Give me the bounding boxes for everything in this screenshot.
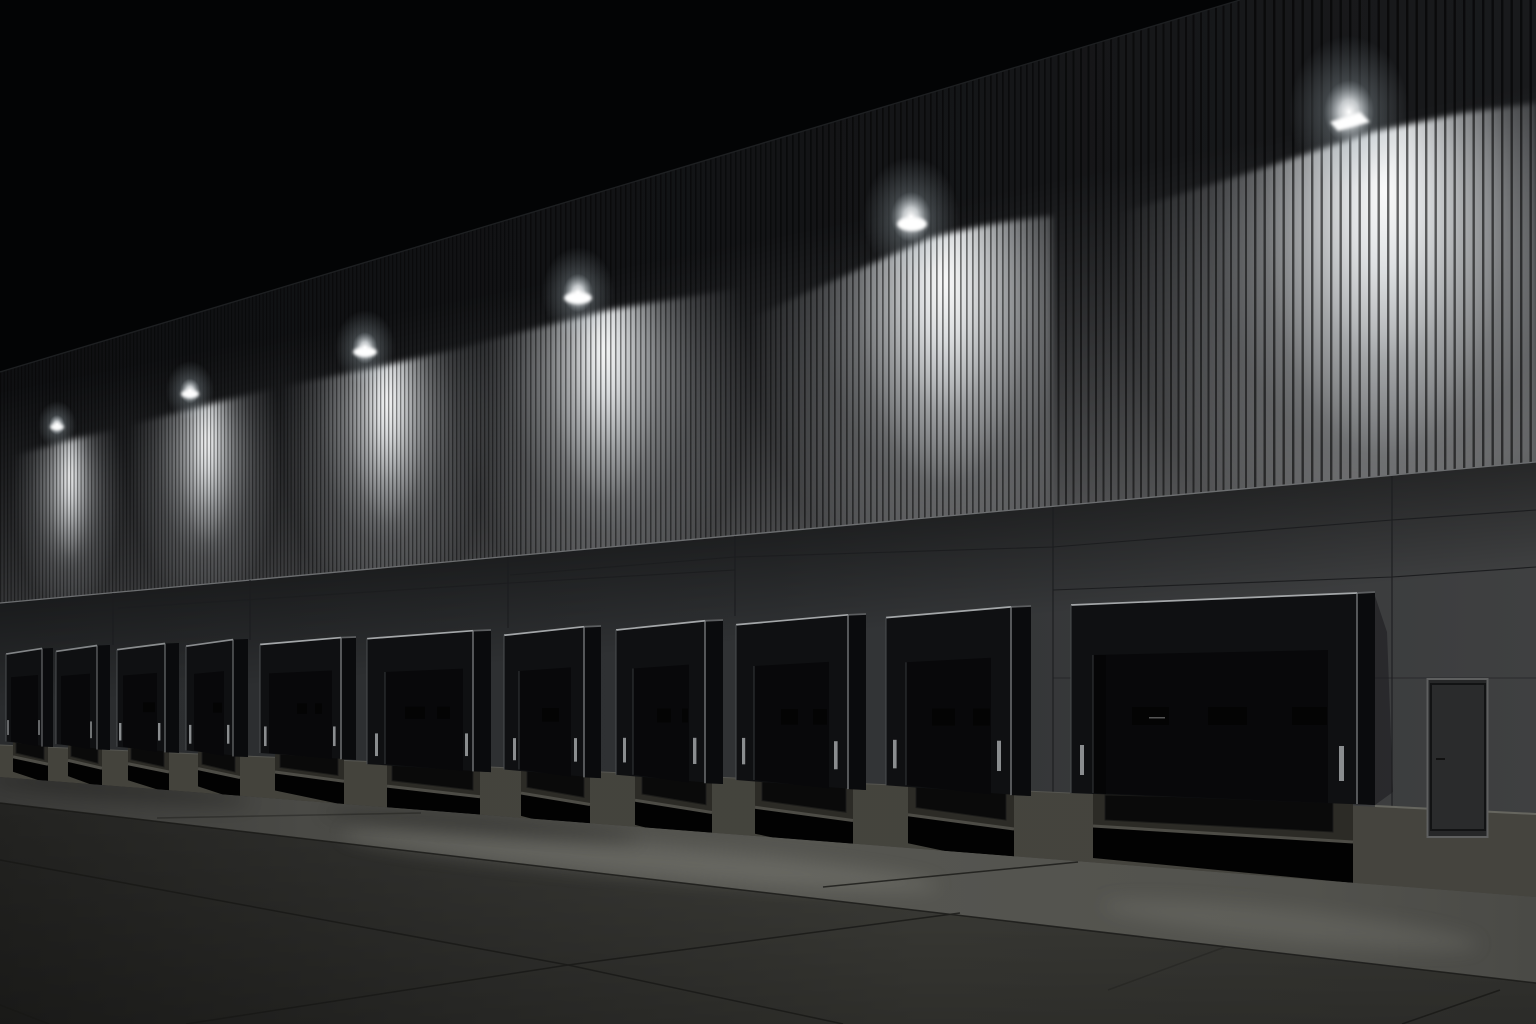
light pool: lamp 4 [470,292,734,554]
wall lamp 6 [1289,36,1409,188]
dock door 3 [117,643,179,793]
dock door 7 [504,626,601,834]
light pool: lamp 2 [136,392,273,586]
corrugated upper wall [0,0,1536,625]
wall lamp 1 [38,401,76,449]
dock door 4 [186,639,248,800]
light pool: lamp 5 [766,214,1055,524]
wall lamp 5 [863,157,959,277]
wall lamp 3 [335,310,395,386]
concrete plinth [0,745,1536,898]
service door [1428,679,1488,837]
dock door 9 [736,614,866,854]
dock door 6 [367,630,491,824]
dock door 1 [6,648,53,783]
wall lamp 4 [542,247,614,339]
lower insulated wall panels [0,462,1536,816]
light pool: lamp 1 [18,432,118,598]
concrete apron floor [0,769,1536,1024]
dock door 5 [260,637,356,805]
light pool: lamp 6 [1142,102,1536,488]
dock door 11 [1071,592,1393,883]
wall top edge [0,0,1240,372]
dock door 8 [616,620,723,844]
vertical wall ribs [0,0,1536,610]
wall lamp 2 [166,361,214,421]
light pool: lamp 3 [289,347,480,571]
dock door 10 [886,606,1031,866]
dock door 2 [56,645,110,788]
